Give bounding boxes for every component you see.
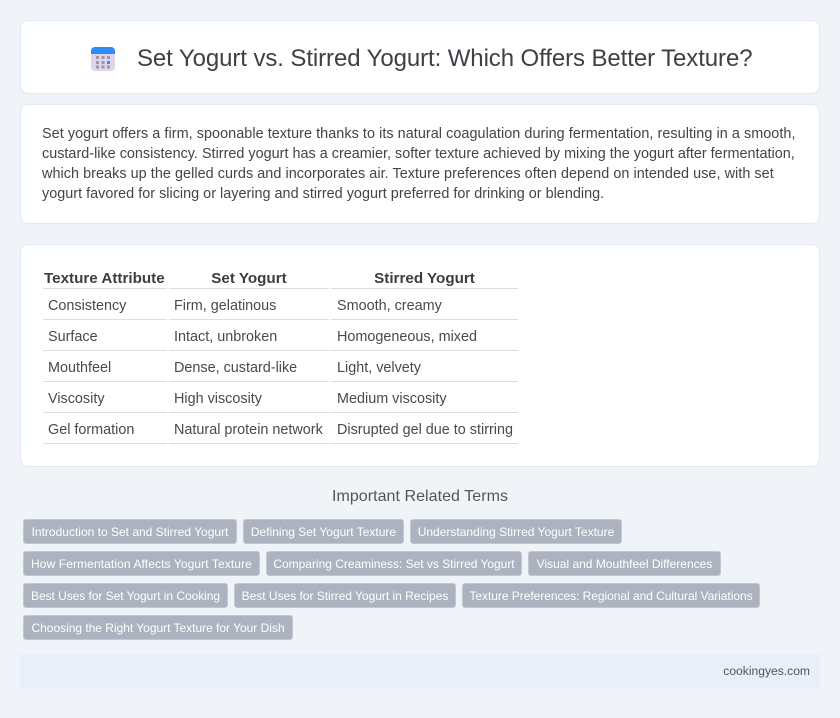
intro paragraph: yogurt favored for slicing or layering and stirred yogurt preferred for drinking or blending.: [42, 186, 604, 202]
row: consistency: [48, 298, 442, 314]
row: consistency: Firm, gelatinous: [174, 298, 276, 314]
tag: How Fermentation Affects Yogurt Texture: [31, 557, 252, 571]
tag: [462, 583, 760, 608]
tag: Best Uses for Set Yogurt in Cooking: [31, 589, 220, 603]
tag: Comparing Creaminess: Set vs Stirred Yogurt: [273, 557, 515, 571]
intro paragraph: custard-like consistency. Stirred yogurt has a creamier, softer texture achieved by mixing the yogurt after fermentation,: [42, 146, 795, 162]
tag: [23, 615, 293, 640]
tag: Introduction to Set and Stirred Yogurt: [32, 525, 228, 539]
tag: [266, 551, 522, 576]
row: viscosity: High viscosity: [174, 391, 262, 407]
row: viscosity: [48, 391, 447, 407]
footer bar: [20, 654, 820, 688]
tag: Understanding Stirred Yogurt Texture: [418, 525, 614, 539]
intro paragraph: Set yogurt offers a firm, spoonable texture thanks to its natural coagulation during fermentation, resulting in a smooth,: [42, 126, 796, 142]
related terms tags: [23, 519, 760, 640]
table header: Texture Attribute: [44, 270, 165, 287]
tag: Visual and Mouthfeel Differences: [537, 557, 712, 571]
table header: Stirred Yogurt: [374, 270, 475, 287]
tag: [243, 519, 404, 544]
tag: Best Uses for Stirred Yogurt in Recipes: [242, 589, 448, 603]
tag: [410, 519, 622, 544]
tag: Choosing the Right Yogurt Texture for Your Dish: [31, 621, 284, 635]
row: surface: Intact, unbroken: [174, 329, 277, 345]
row: viscosity: Viscosity: [48, 391, 105, 407]
table panel: [20, 244, 820, 467]
related terms heading: Important Related Terms: [332, 488, 508, 505]
row: mouthfeel: Light, velvety: [337, 360, 421, 376]
row: gel formation: Disrupted gel due to stirring: [337, 422, 513, 438]
table header: Set Yogurt: [211, 270, 287, 287]
row: mouthfeel: [48, 360, 421, 376]
title: Set Yogurt vs. Stirred Yogurt: Which Offers Better Texture?: [137, 45, 752, 72]
intro text panel: [20, 104, 820, 224]
row: viscosity: Medium viscosity: [337, 391, 447, 407]
tag: [234, 583, 456, 608]
intro paragraph: [42, 126, 796, 202]
row: consistency: Consistency: [48, 298, 126, 314]
tag: Texture Preferences: Regional and Cultural Variations: [469, 589, 753, 603]
tag: [23, 551, 260, 576]
header panel: [20, 20, 820, 94]
icon: calendar: [91, 47, 115, 71]
row: surface: [48, 329, 477, 345]
row: surface: Homogeneous, mixed: [337, 329, 477, 345]
row: gel formation: [48, 422, 513, 438]
table header: [44, 270, 475, 287]
tag: Defining Set Yogurt Texture: [251, 525, 396, 539]
row: consistency: Smooth, creamy: [337, 298, 442, 314]
row: mouthfeel: Mouthfeel: [48, 360, 111, 376]
tag: [23, 583, 228, 608]
row: gel formation: Gel formation: [48, 422, 134, 438]
intro paragraph: which breaks up the gelled curds and incorporates air. Texture preferences often depend on intended use, with set: [42, 166, 774, 182]
row: mouthfeel: Dense, custard-like: [174, 360, 297, 376]
comparison table: [43, 270, 518, 444]
tag: [528, 551, 721, 576]
source credit: cookingyes.com: [723, 664, 810, 678]
row: surface: Surface: [48, 329, 98, 345]
tag: [23, 519, 237, 544]
row: gel formation: Natural protein network: [174, 422, 323, 438]
